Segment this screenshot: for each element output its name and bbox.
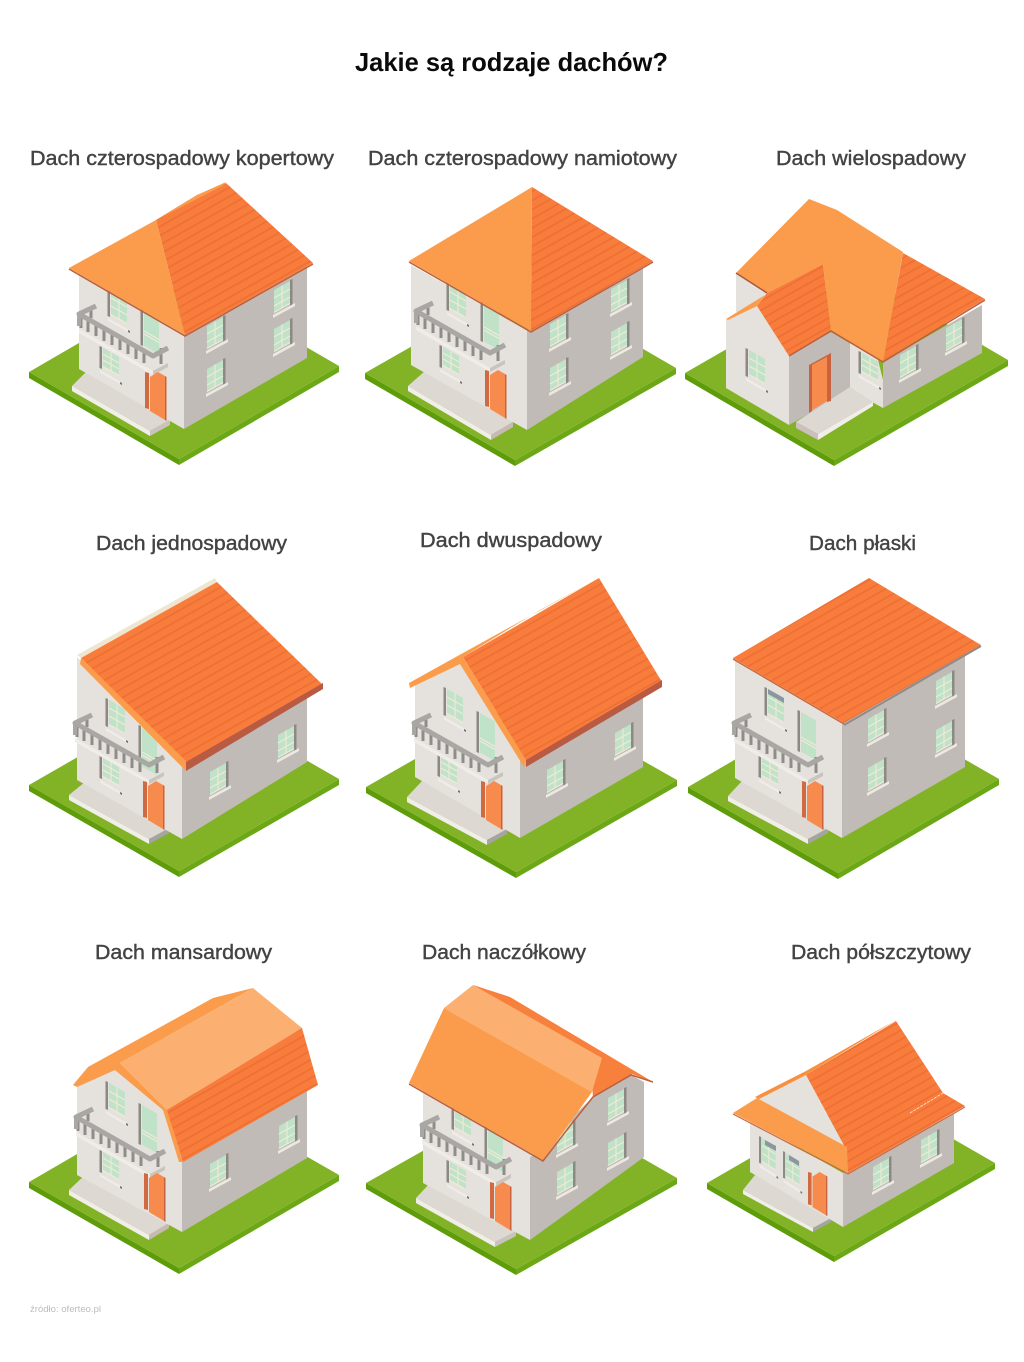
windows	[100, 698, 299, 800]
lawn	[365, 281, 676, 466]
windows	[759, 1129, 942, 1195]
balcony	[76, 1109, 165, 1178]
balcony	[422, 1117, 511, 1186]
house: half-gable roof (półszczytowy)	[707, 1020, 995, 1262]
roof	[77, 578, 323, 771]
windows	[100, 1081, 300, 1192]
roof	[69, 182, 313, 336]
door	[809, 353, 831, 413]
door	[485, 370, 506, 419]
roof	[733, 578, 981, 725]
windows	[440, 278, 632, 396]
door	[802, 781, 824, 830]
windows	[100, 279, 295, 397]
roof	[733, 1020, 965, 1174]
walls	[77, 1068, 307, 1232]
door	[145, 372, 166, 421]
heading: Dach czterospadowy kopertowy: Dach czterospadowy kopertowy	[30, 148, 334, 170]
porch	[728, 780, 828, 844]
porch	[407, 780, 507, 845]
door	[490, 1182, 512, 1231]
balcony	[416, 303, 505, 372]
heading: Dach naczółkowy: Dach naczółkowy	[422, 942, 586, 964]
balcony	[79, 306, 168, 375]
balcony	[75, 715, 164, 784]
walls	[79, 265, 307, 429]
house: mono-pitch roof (jednospadowy)	[29, 578, 339, 877]
lawn	[688, 693, 999, 879]
lawn	[29, 279, 339, 465]
title: Jakie są rodzaje dachów?	[355, 47, 668, 77]
roof	[409, 578, 662, 767]
windows	[438, 687, 636, 798]
roof	[73, 988, 318, 1162]
heading: Dach czterospadowy namiotowy: Dach czterospadowy namiotowy	[368, 148, 677, 170]
house: flat roof (płaski)	[688, 578, 999, 879]
door	[481, 781, 502, 830]
roof	[409, 985, 653, 1161]
lawn	[29, 1089, 339, 1274]
house: multi-slope roof (wielospadowy)	[685, 199, 1008, 466]
windows	[446, 1087, 629, 1200]
heading: Dach płaski: Dach płaski	[809, 533, 916, 555]
walls	[77, 657, 307, 839]
walls	[735, 650, 965, 838]
source note: źródło: oferteo.pl	[30, 1304, 101, 1315]
windows	[758, 670, 957, 796]
door	[143, 781, 164, 830]
porch	[69, 782, 169, 844]
heading: Dach dwuspadowy: Dach dwuspadowy	[420, 530, 602, 552]
door	[144, 1173, 166, 1222]
house: half-hip roof (naczółkowy)	[366, 985, 677, 1275]
heading: Dach wielospadowy: Dach wielospadowy	[776, 148, 966, 170]
heading: Dach półszczytowy: Dach półszczytowy	[791, 942, 971, 964]
lawn	[707, 1090, 995, 1262]
lawn	[685, 273, 1008, 466]
porch	[743, 1175, 831, 1232]
door	[808, 1172, 827, 1216]
walls	[423, 1075, 644, 1240]
lawn	[366, 1092, 677, 1275]
porch	[69, 1175, 169, 1240]
walls	[411, 265, 643, 430]
house: hip roof (kopertowy)	[29, 182, 339, 465]
heading: Dach jednospadowy: Dach jednospadowy	[96, 533, 287, 555]
roof	[409, 187, 653, 332]
windows	[746, 317, 967, 393]
walls	[750, 1113, 954, 1227]
house: mansard roof (mansardowy)	[29, 988, 339, 1274]
porch	[408, 371, 513, 440]
house: pyramid roof (namiotowy)	[365, 187, 676, 466]
heading: Dach mansardowy: Dach mansardowy	[95, 942, 272, 964]
porch	[796, 387, 873, 440]
walls	[726, 273, 982, 425]
balcony	[734, 715, 823, 784]
roof	[726, 199, 985, 362]
porch	[72, 371, 170, 436]
lawn	[29, 693, 339, 877]
lawn	[366, 695, 677, 878]
house: gable roof (dwuspadowy)	[366, 578, 677, 878]
walls	[415, 660, 643, 838]
porch	[416, 1181, 516, 1247]
balcony	[414, 715, 503, 784]
